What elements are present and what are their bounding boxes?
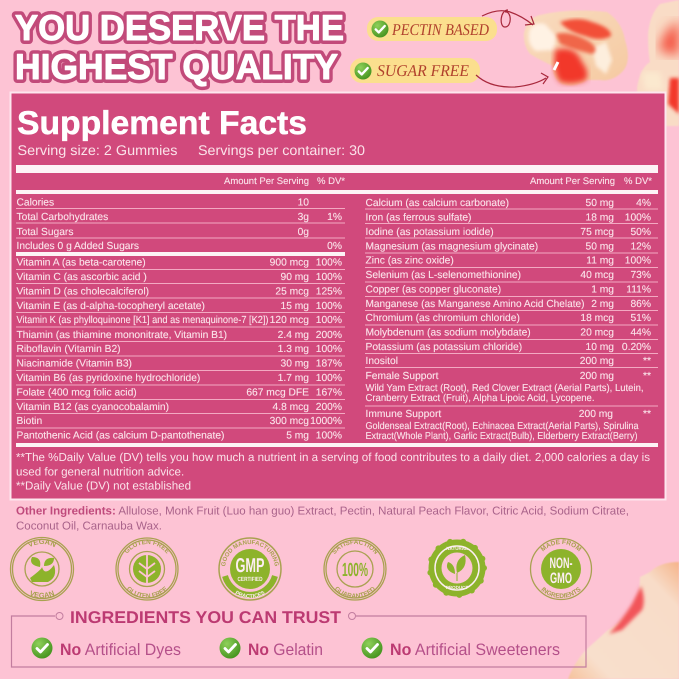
table: right nutrient column: Inositol <box>366 356 398 367</box>
icon: non-GMO badge: GMO <box>550 570 572 587</box>
table: right nutrient column: 20 mcg <box>580 328 614 338</box>
table: right nutrient column: Iron (as ferrous sulfate) <box>366 212 471 224</box>
table: left nutrient column: 667 mcg DFE <box>246 388 309 398</box>
panel: supplement facts <box>10 92 666 500</box>
table: right nutrient column: Potassium (as potassium chloride) <box>366 342 522 353</box>
icon: vegan badge: VEGAN <box>27 538 56 548</box>
icon: natural product badge <box>428 540 486 596</box>
table: right nutrient column: Chromium (as chromium chloride) <box>366 313 520 324</box>
image: right peach gummy <box>637 0 679 126</box>
table: left nutrient column: 100% <box>316 272 342 283</box>
table: left nutrient column: Vitamin C (as ascorbic acid ) <box>16 272 147 283</box>
table: right nutrient column: Wild Yam Extract (Root), Red Clover Extract (Aerial Parts), Lutein, <box>366 383 644 394</box>
other ingredients: Other Ingredients: Allulose, Monk Fruit (Luo han guo) Extract, Pectin, Natural Peach Flavor, Citric Acid, Sodium Citrate, <box>16 506 629 518</box>
icon: satisfaction guarantee badge: SATISFACTION <box>332 540 378 554</box>
table: left nutrient column: Total Carbohydrates <box>16 212 108 223</box>
table: right nutrient column: 100% <box>625 256 651 266</box>
table: left nutrient column: % DV* <box>317 176 345 187</box>
table: left nutrient column: 10 <box>298 198 309 208</box>
title: HIGHEST QUALITY <box>15 46 338 87</box>
table: right nutrient column: 50 mg <box>586 242 614 252</box>
table: right nutrient column: 100% <box>625 212 651 224</box>
table: right nutrient column: ** <box>643 371 651 382</box>
table: right nutrient column: 12% <box>630 242 651 252</box>
other ingredients <box>16 506 629 532</box>
table: right nutrient column: Selenium (as L-selenomethionine) <box>366 270 521 281</box>
table: left nutrient column: 200% <box>316 402 342 413</box>
table: left nutrient column: Total Sugars <box>16 227 73 238</box>
title: HIGHEST QUALITY <box>15 46 338 87</box>
heading: INGREDIENTS YOU CAN TRUST <box>70 608 342 627</box>
table: left nutrient column: Includes 0 g Added Sugars <box>16 241 139 252</box>
table: left nutrient column: 30 mg <box>280 358 309 370</box>
table: right nutrient column: Copper (as copper gluconate) <box>366 284 501 296</box>
table: left nutrient column: Folate (400 mcg folic acid) <box>16 388 137 398</box>
table: right nutrient column: 73% <box>630 270 651 281</box>
badge: pectin based: PECTIN BASED <box>391 20 489 39</box>
table: left nutrient column: 1.7 mg <box>278 373 309 384</box>
table: right nutrient column: 18 mg <box>586 212 614 224</box>
icon: GMP badge: CERTIFIED <box>238 576 263 583</box>
badge: sugar free: SUGAR FREE <box>377 61 469 80</box>
table: left nutrient column <box>16 176 345 442</box>
table: left nutrient column: 187% <box>316 358 342 370</box>
table: left nutrient column: 5 mg <box>286 430 309 442</box>
table: left nutrient column: 0% <box>327 241 342 252</box>
serving size: Serving size: 2 Gummies <box>18 142 178 158</box>
icon: GMP badge <box>218 537 282 601</box>
badge: pectin based <box>367 17 497 41</box>
icon: gluten free badge: GLUTEN FREE <box>125 539 168 554</box>
item: no gelatin <box>220 638 323 659</box>
icon: vegan badge: VEGAN <box>30 590 54 598</box>
icon: GMP badge: GOOD MANUFACTURING <box>221 540 279 566</box>
arrow: sugar free to gummy <box>476 73 548 87</box>
item: no artificial sweeteners: No Artificial Sweeteners <box>390 641 560 659</box>
table: right nutrient column: Cranberry Extract (Fruit), Alpha Lipoic Acid, Lycopene. <box>366 393 594 404</box>
table: right nutrient column: Amount Per Serving <box>530 176 615 187</box>
table: right nutrient column: 11 mg <box>586 256 614 266</box>
table: left nutrient column: Amount Per Serving <box>224 176 309 187</box>
table: left nutrient column: 1% <box>327 212 342 223</box>
icon: non-GMO badge: NON- <box>550 555 573 572</box>
table: left nutrient column: Vitamin K (as phylloquinone [K1] and as menaquinone-7 [K2]) <box>16 315 268 326</box>
item: no artificial dyes: No Artificial Dyes <box>60 641 181 659</box>
table: left nutrient column: 200% <box>316 330 342 341</box>
table: left nutrient column: 2.4 mg <box>278 330 309 341</box>
table: left nutrient column: Vitamin B6 (as pyridoxine hydrochloride) <box>16 373 200 384</box>
footnotes: **Daily Value (DV) not established <box>16 480 191 492</box>
table: right nutrient column: 75 mcg <box>580 227 614 238</box>
table: right nutrient column <box>366 176 652 442</box>
table: right nutrient column: 86% <box>630 299 651 310</box>
table: left nutrient column: 300 mcg <box>270 416 309 427</box>
table: right nutrient column: 200 mg <box>580 356 614 367</box>
icon: GMP badge: PRACTICES <box>235 590 265 598</box>
table: right nutrient column: Extract(Whole Plant), Garlic Extract(Bulb), Elderberry Extract(Berry) <box>366 431 638 442</box>
table: left nutrient column: 1.3 mg <box>278 344 309 355</box>
table: left nutrient column: 100% <box>316 258 342 268</box>
footnotes: **The %Daily Value (DV) tells you how much a nutrient in a serving of food contributes to a daily diet. 2,000 calories a day is <box>16 451 650 464</box>
table: right nutrient column: 200 mg <box>579 409 613 420</box>
icon: check <box>354 62 372 80</box>
table: right nutrient column: 1 mg <box>591 284 614 296</box>
table: left nutrient column: Calories <box>16 198 54 208</box>
table: left nutrient column: 100% <box>316 301 342 312</box>
table: left nutrient column: 3g <box>298 212 309 223</box>
table: right nutrient column: ** <box>643 356 651 367</box>
icon: non-GMO badge <box>530 538 592 600</box>
item: no gelatin: No Gelatin <box>248 641 323 659</box>
table: left nutrient column: Riboflavin (Vitamin B2) <box>16 344 121 355</box>
table: left nutrient column: Biotin <box>16 416 42 427</box>
table: right nutrient column: 4% <box>636 198 651 209</box>
table: right nutrient column: Molybdenum (as sodium molybdate) <box>366 328 531 338</box>
heading: Supplement Facts <box>17 104 307 141</box>
icon: check <box>372 20 388 38</box>
icon: satisfaction guarantee badge: GUARANTEED <box>335 586 375 598</box>
table: right nutrient column: 50 mg <box>586 198 614 209</box>
table: right nutrient column: Magnesium (as magnesium glycinate) <box>366 242 538 252</box>
table: right nutrient column: 50% <box>630 227 651 238</box>
icon: natural product badge: NATURAL <box>446 546 468 551</box>
item: no artificial dyes <box>32 638 181 659</box>
table: left nutrient column: 100% <box>316 315 342 326</box>
table: left nutrient column: Vitamin D (as cholecalciferol) <box>16 286 149 298</box>
table: left nutrient column: Thiamin (as thiamine mononitrate, Vitamin B1) <box>16 330 227 341</box>
icon: vegan badge <box>10 536 74 602</box>
table: right nutrient column: % DV* <box>624 176 652 187</box>
icon: gluten free badge <box>115 537 179 601</box>
table: right nutrient column: ** <box>643 409 651 420</box>
table: right nutrient column: 44% <box>630 328 651 338</box>
table: right nutrient column: Goldenseal Extract(Root), Echinacea Extract(Aerial Parts), Spirulina <box>366 421 639 432</box>
icon: satisfaction guarantee badge <box>323 537 387 601</box>
table: right nutrient column: 18 mcg <box>580 313 614 324</box>
table: left nutrient column: 100% <box>316 344 342 355</box>
servings per container: Servings per container: 30 <box>198 142 365 158</box>
table: left nutrient column: 90 mg <box>280 272 309 283</box>
table: left nutrient column: 4.8 mcg <box>273 402 309 413</box>
table: left nutrient column: 167% <box>316 388 342 398</box>
title: YOU DESERVE THE <box>15 7 344 48</box>
table: left nutrient column: 25 mcg <box>275 286 309 298</box>
table: left nutrient column: 100% <box>316 373 342 384</box>
table: left nutrient column: Vitamin B12 (as cyanocobalamin) <box>16 402 169 413</box>
icon: natural product badge: PRODUCT <box>446 585 468 590</box>
table: right nutrient column: Female Support <box>366 371 439 382</box>
image: peach <box>568 562 679 679</box>
table: right nutrient column: 0.20% <box>622 342 651 353</box>
table: right nutrient column: 51% <box>630 313 651 324</box>
table: right nutrient column: 40 mcg <box>580 270 614 281</box>
table: left nutrient column: 100% <box>316 430 342 442</box>
table: right nutrient column: 10 mg <box>586 342 614 353</box>
icon: non-GMO badge: MADE FROM <box>540 540 582 552</box>
table: left nutrient column: 0g <box>298 227 309 238</box>
icon: gluten free badge: GLUTEN FREE <box>127 586 167 598</box>
footnotes <box>16 451 650 492</box>
table: right nutrient column: 2 mg <box>591 299 614 310</box>
arrow: pectin to gummy <box>482 10 534 27</box>
image: peach gummy <box>524 11 628 85</box>
table: left nutrient column: 900 mcg <box>270 258 309 268</box>
table: right nutrient column: 200 mg <box>580 371 614 382</box>
table: right nutrient column: Zinc (as zinc oxide) <box>366 256 454 266</box>
table: left nutrient column: 15 mg <box>280 301 309 312</box>
other ingredients: Coconut Oil, Carnauba Wax. <box>16 520 162 532</box>
title <box>15 7 344 87</box>
table: left nutrient column: 120 mcg <box>270 315 309 326</box>
table: right nutrient column: Immune Support <box>366 409 441 420</box>
table: right nutrient column: Manganese (as Manganese Amino Acid Chelate) <box>366 299 584 310</box>
table: left nutrient column: Pantothenic Acid (as calcium D-pantothenate) <box>16 430 224 442</box>
badge: sugar free <box>350 58 480 83</box>
footnotes: used for general nutrition advice. <box>16 466 184 478</box>
icon: GMP badge: GMP <box>236 555 264 577</box>
panel: ingredients you can trust <box>12 608 586 667</box>
table: right nutrient column: Iodine (as potassium iodide) <box>366 227 494 238</box>
table: right nutrient column: 111% <box>626 284 651 296</box>
icon: non-GMO badge: INGREDIENTS <box>541 586 580 598</box>
icon: satisfaction guarantee badge: 100% <box>342 560 368 581</box>
table: left nutrient column: 125% <box>316 286 342 298</box>
table: left nutrient column: Niacinamide (Vitamin B3) <box>16 358 132 370</box>
table: left nutrient column: 1000% <box>310 416 342 427</box>
table: left nutrient column: Vitamin A (as beta-carotene) <box>16 258 146 268</box>
title: YOU DESERVE THE <box>15 7 344 48</box>
table: left nutrient column: Vitamin E (as d-alpha-tocopheryl acetate) <box>16 301 205 312</box>
table: right nutrient column: Calcium (as calcium carbonate) <box>366 198 509 209</box>
